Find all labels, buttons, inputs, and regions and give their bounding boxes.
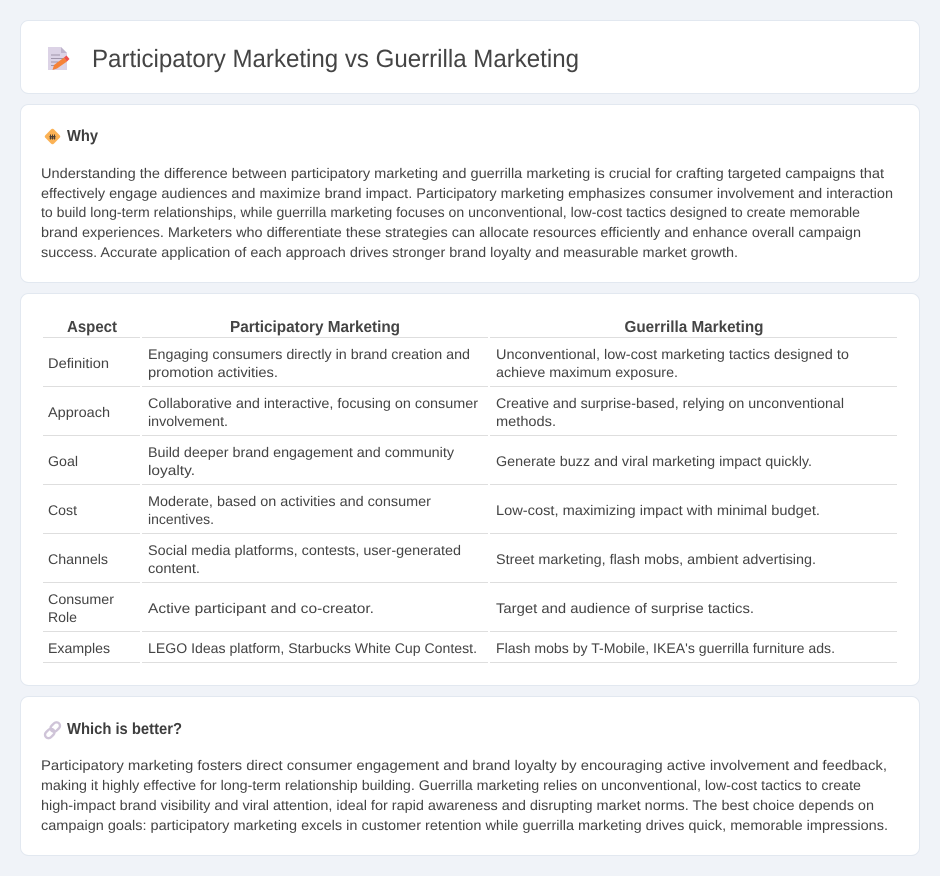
row: approach: Approach [48,404,110,420]
row: consumer role: Target and audience of surprise tactics. [496,600,754,616]
text block: why paragraph: brand experiences. Marketers who differentiate these strategies can allocate resources efficiently and enhance overall campaign [41,224,861,240]
row: channels: Social media platforms, contests, user-generated [148,542,461,558]
table header [67,319,764,336]
row: goal [48,444,812,478]
row: consumer role [48,591,754,625]
row: examples: LEGO Ideas platform, Starbucks White Cup Contest. [148,640,477,656]
text block: which is better paragraph: Participatory marketing fosters direct consumer engagement and brand loyalty by encouraging active involvement and feedback, [41,757,887,773]
text block: why paragraph: to build long-term relationships, while guerrilla marketing focuses on unconventional, low-cost tactics designed to create memorable [41,204,860,220]
icon: chain link [44,721,61,740]
text block: which is better paragraph: making it highly effective for long-term relationship building. Guerrilla marketing relies on unconventional, low-cost tactics to create [41,777,861,793]
text block: which is better paragraph: campaign goals: participatory marketing excels in customer retention while guerrilla marketing drives quick, memorable impressions. [41,817,888,833]
text block: why paragraph: success. Accurate application of each approach drives stronger brand loyalty and measurable market growth. [41,244,738,260]
text block: which is better paragraph [41,757,888,833]
panel: comparison table [20,294,920,686]
row: cost: incentives. [148,511,214,527]
row: definition: Definition [48,355,109,371]
text block: why paragraph [41,165,893,260]
row: cost [48,493,820,527]
row: definition: Unconventional, low-cost marketing tactics designed to [496,346,849,362]
heading: why: Why [67,128,98,145]
row: definition: Engaging consumers directly in brand creation and [148,346,470,362]
row: channels: Street marketing, flash mobs, ambient advertising. [496,551,816,567]
row: channels: Channels [48,551,108,567]
row: consumer role: Consumer [48,591,114,607]
row: approach: involvement. [148,413,228,429]
icon: document with pencil [48,47,70,70]
row: examples: Flash mobs by T-Mobile, IKEA's guerrilla furniture ads. [496,640,835,656]
row: consumer role: Role [48,609,77,625]
row: approach: Creative and surprise-based, relying on unconventional [496,395,844,411]
row: approach: methods. [496,413,556,429]
row: cost: Moderate, based on activities and consumer [148,493,431,509]
row: definition: achieve maximum exposure. [496,364,678,380]
row: goal: Build deeper brand engagement and community [148,444,454,460]
row: goal: Generate buzz and viral marketing impact quickly. [496,453,812,469]
row: definition: promotion activities. [148,364,278,380]
row: goal: Goal [48,453,78,469]
row: examples [48,640,835,656]
text block: which is better paragraph: high-impact brand visibility and viral attention, ideal for rapid awareness and disrupting market norms. The best choice depends on [41,797,874,813]
row: examples: Examples [48,640,110,656]
title: Participatory Marketing vs Guerrilla Marketing [92,45,579,73]
text block: why paragraph: Understanding the difference between participatory marketing and guerrilla marketing is crucial for crafting targeted campaigns that [41,165,884,181]
panel: which is better [20,696,920,856]
row: approach [48,395,844,429]
row: definition [48,346,849,380]
row: channels [48,542,816,576]
panel: why [20,104,920,282]
table header: Participatory Marketing [230,319,400,336]
table header: Guerrilla Marketing [624,319,764,336]
row: approach: Collaborative and interactive, focusing on consumer [148,395,478,411]
row: cost: Low-cost, maximizing impact with minimal budget. [496,502,820,518]
text block: why paragraph: effectively engage audiences and maximize brand impact. Participatory marketing emphasizes consumer involvement and interaction [41,185,893,201]
row: cost: Cost [48,502,77,518]
table header: Aspect [67,319,118,336]
row: channels: content. [148,560,200,576]
heading: which is better: Which is better? [67,721,182,738]
row: goal: loyalty. [148,462,195,478]
row: consumer role: Active participant and co-creator. [148,600,374,616]
panel: title header [20,20,920,94]
icon: warning diamond [44,128,61,145]
